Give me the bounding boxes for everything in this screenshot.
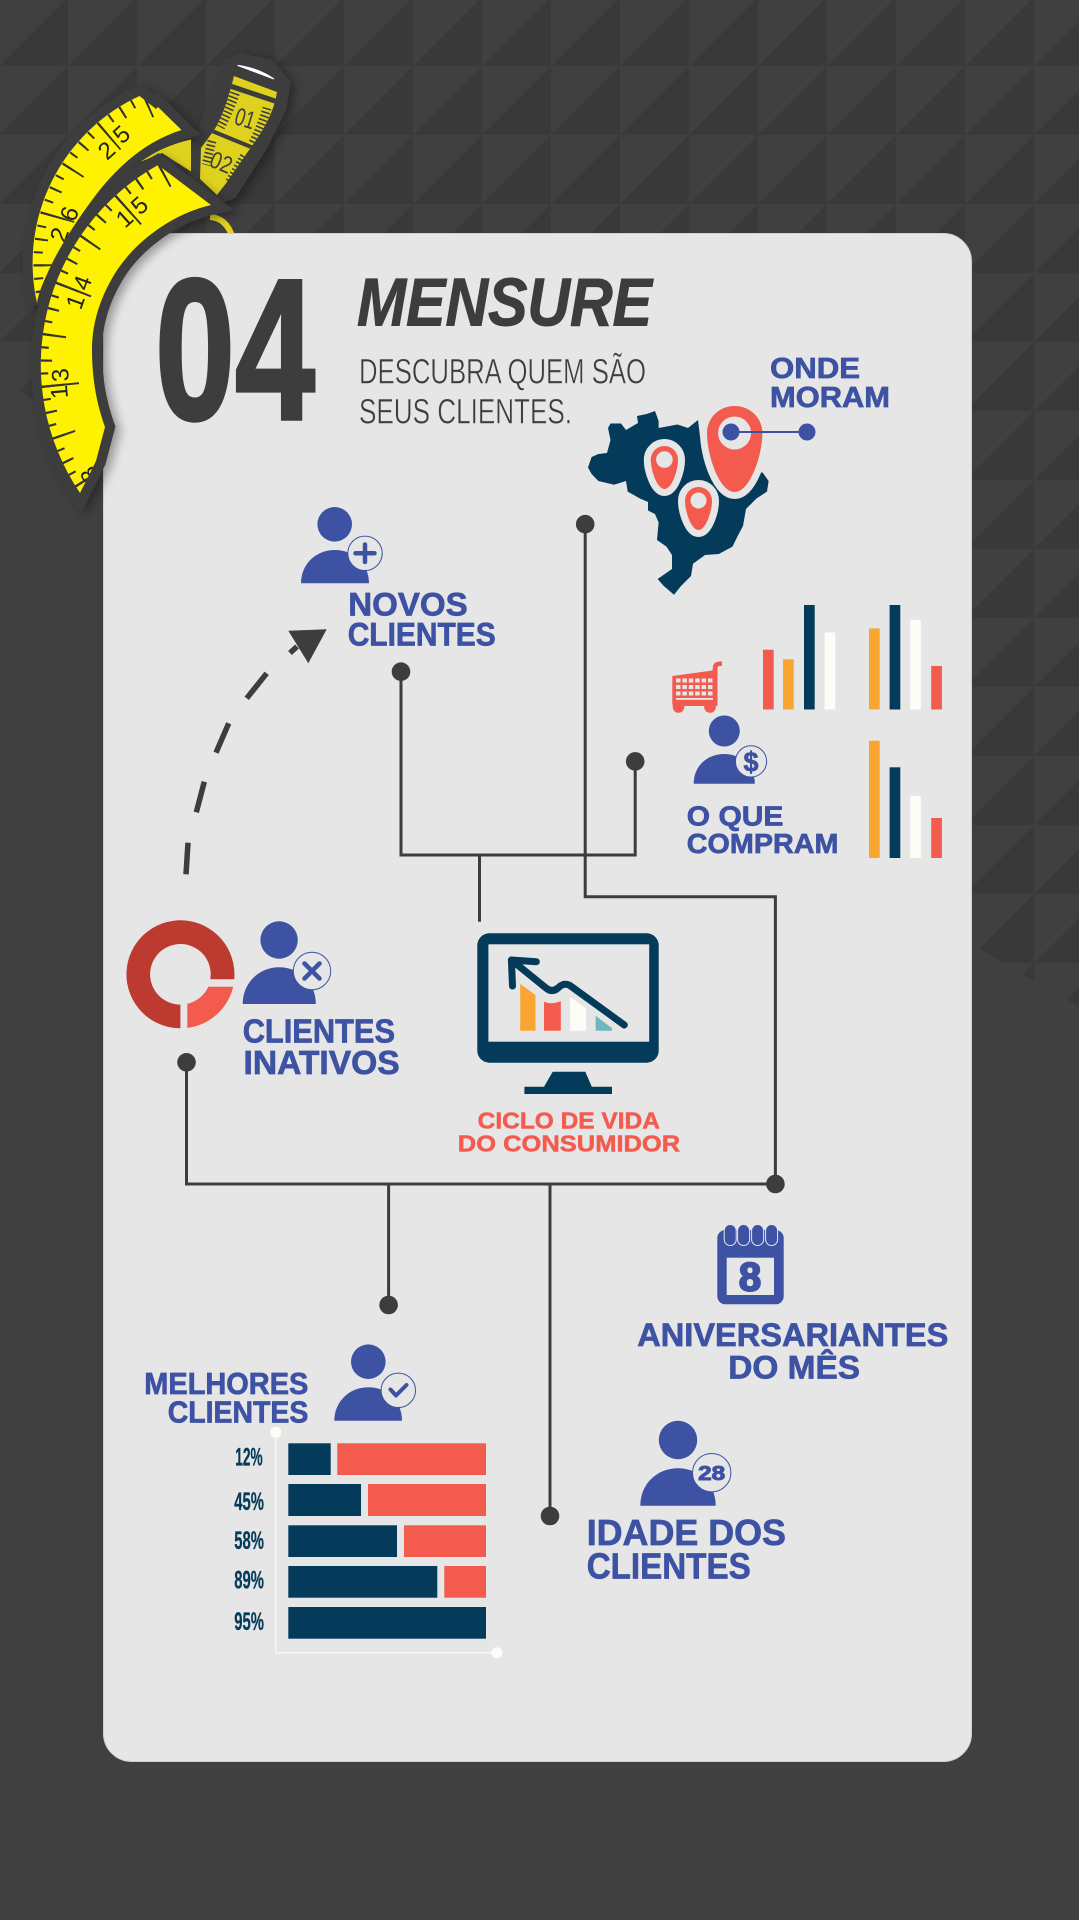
heading: o que compram: O QUE xyxy=(687,801,783,832)
row 12%: 12% xyxy=(235,1444,263,1472)
tape: back strip: 6 xyxy=(55,203,85,225)
heading: idade dos clientes: CLIENTES xyxy=(587,1545,751,1586)
heading: novos clientes: CLIENTES xyxy=(348,617,496,653)
bar chart: purchases bottom xyxy=(869,741,942,858)
subtitle: DESCUBRA QUEM SÃO xyxy=(359,352,646,391)
icon: customer age: 28 xyxy=(698,1463,725,1485)
tape: small end: 01 xyxy=(231,103,259,135)
subtitle: SEUS CLIENTES. xyxy=(359,392,572,431)
heading: clientes inativos xyxy=(243,1013,400,1081)
row 58%: 58% xyxy=(234,1527,264,1555)
icon: shopping cart xyxy=(672,661,722,713)
tape: front strip: 1 xyxy=(61,291,91,313)
icon: best customer xyxy=(334,1344,415,1421)
row 58% xyxy=(234,1525,486,1557)
row 95%: 95% xyxy=(234,1608,264,1636)
tape: back strip: 2 xyxy=(45,224,75,246)
row 89% xyxy=(234,1566,486,1598)
heading: melhores clientes: MELHORES xyxy=(144,1367,308,1401)
heading: melhores clientes xyxy=(144,1367,308,1430)
tape: front strip: 4 xyxy=(68,272,98,294)
title: MENSURE xyxy=(357,264,654,340)
tape: small end: 02 xyxy=(206,146,236,180)
tape: fold triangle xyxy=(140,140,191,172)
heading: aniversariantes: DO MÊS xyxy=(728,1349,860,1385)
heading: ciclo de vida: CICLO DE VIDA xyxy=(478,1107,660,1133)
icon: new customer xyxy=(301,507,382,583)
heading: onde moram: ONDE xyxy=(770,353,860,385)
heading: onde moram: MORAM xyxy=(770,382,890,414)
tape: front strip: 1 xyxy=(46,384,74,400)
number 04: 04 xyxy=(155,237,315,462)
bar chart: purchases top xyxy=(763,605,942,710)
heading: novos clientes xyxy=(348,587,496,653)
heading: o que compram: COMPRAM xyxy=(687,828,838,859)
icon: customer with dollar xyxy=(694,716,767,784)
heading: ciclo de vida: DO CONSUMIDOR xyxy=(458,1131,680,1157)
row 12% xyxy=(235,1443,486,1475)
tape: front strip: 5 xyxy=(126,191,154,221)
row 45%: 45% xyxy=(234,1488,264,1516)
tape curl behind panel xyxy=(210,217,232,236)
connector lines xyxy=(177,515,785,1525)
tape: front strip: 3 xyxy=(47,367,75,383)
heading: aniversariantes xyxy=(637,1317,948,1385)
chart: donut xyxy=(126,920,234,1028)
heading: melhores clientes: CLIENTES xyxy=(168,1396,308,1430)
icon: monitor with chart xyxy=(477,933,659,1094)
map pins xyxy=(651,406,816,530)
tape: front strip xyxy=(38,152,234,512)
icon: inactive customer xyxy=(243,921,331,1004)
icon: customer age xyxy=(640,1421,731,1506)
heading: onde moram xyxy=(770,353,890,414)
tape: back strip xyxy=(32,88,202,308)
map of Brazil xyxy=(588,411,769,595)
chart: best customers bars xyxy=(234,1427,502,1658)
heading: ciclo de vida xyxy=(458,1107,680,1157)
tape: back strip: 5 xyxy=(108,120,136,150)
heading: o que compram xyxy=(687,801,838,859)
icon: calendar xyxy=(717,1224,784,1304)
heading: idade dos clientes xyxy=(587,1512,786,1586)
panel xyxy=(104,234,972,1762)
heading: aniversariantes: ANIVERSARIANTES xyxy=(637,1317,948,1353)
row 95% xyxy=(234,1607,486,1639)
icon: measuring tape xyxy=(32,61,296,512)
heading: clientes inativos: INATIVOS xyxy=(244,1044,400,1081)
chart axes xyxy=(270,1427,502,1658)
subtitle xyxy=(359,352,646,431)
tape: small end xyxy=(190,55,289,203)
tape: back strip: 2 xyxy=(93,136,121,166)
heading: clientes inativos: CLIENTES xyxy=(243,1013,395,1050)
heading: novos clientes: NOVOS xyxy=(348,587,468,623)
tape: front strip: 1 xyxy=(111,204,139,234)
row 45% xyxy=(234,1484,486,1516)
tape: front strip: 8 xyxy=(75,461,105,487)
arrow: dashed curve xyxy=(186,629,327,874)
row 89%: 89% xyxy=(234,1566,264,1594)
heading: idade dos clientes: IDADE DOS xyxy=(587,1512,786,1553)
icon: customer with dollar: $ xyxy=(744,746,759,778)
icon: calendar: 8 xyxy=(739,1256,761,1300)
